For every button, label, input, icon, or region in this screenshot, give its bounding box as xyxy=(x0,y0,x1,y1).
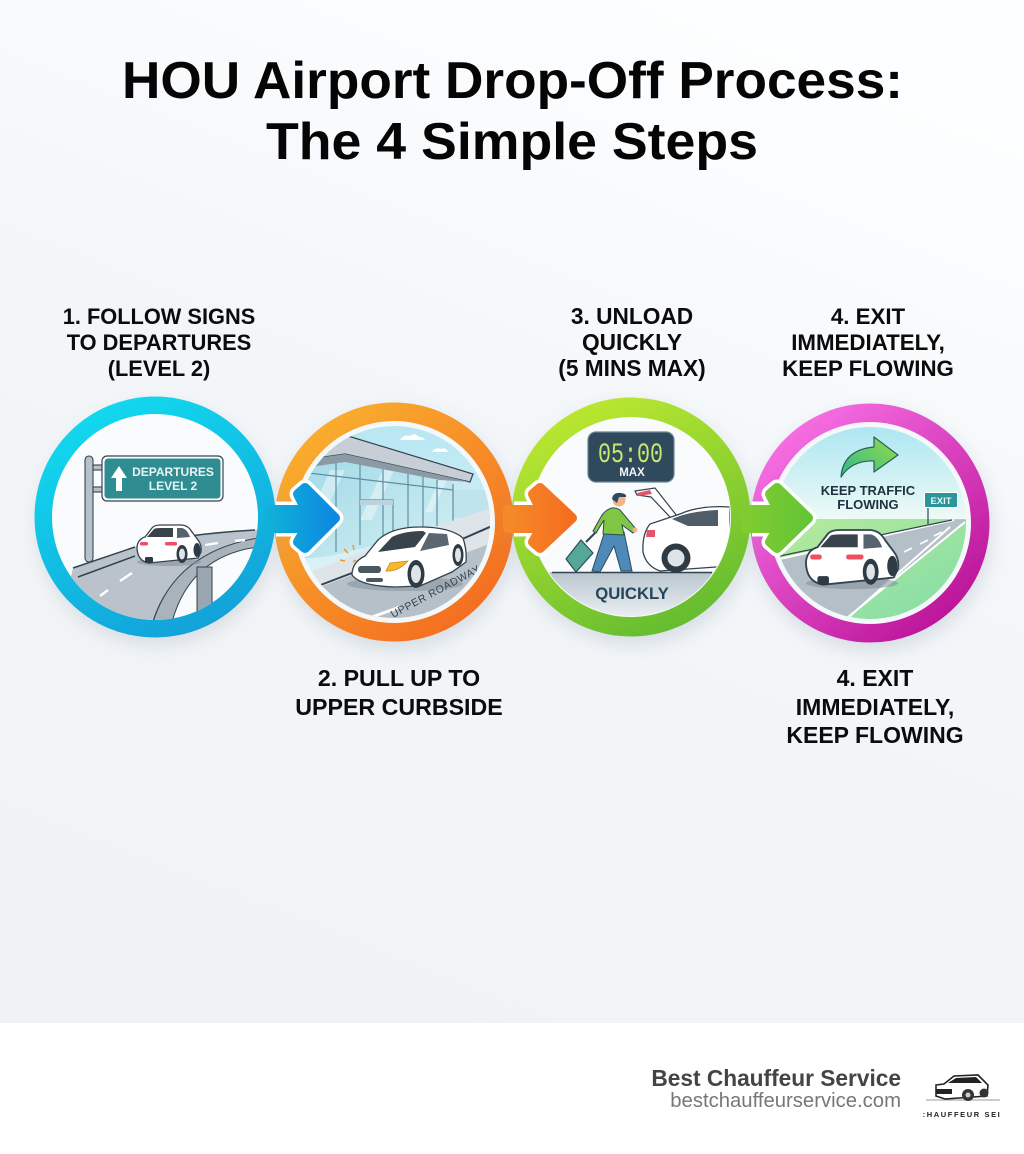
label: step 4 upper: KEEP FLOWING xyxy=(782,356,954,381)
scene: unloading xyxy=(548,431,730,616)
exit sign xyxy=(924,492,958,524)
departures sign: LEVEL 2 xyxy=(149,479,198,493)
label: step 4 upper: 4. EXIT xyxy=(831,304,906,329)
title xyxy=(122,52,903,171)
scene: terminal and car xyxy=(304,426,490,618)
person with luggage xyxy=(566,493,638,572)
label: step 1: TO DEPARTURES xyxy=(67,330,251,355)
scene: road and keep traffic flowing: FLOWING xyxy=(837,497,899,512)
scene: road and keep traffic flowing xyxy=(780,427,966,619)
departures sign xyxy=(102,456,223,501)
timer xyxy=(588,432,674,482)
circle: step 2 upper curbside xyxy=(274,402,516,650)
footer brand text: bestchauffeurservice.com xyxy=(670,1090,901,1112)
label: step 4 lower: IMMEDIATELY, xyxy=(796,694,954,720)
footer brand text xyxy=(651,1065,901,1112)
label: step 3: QUICKLY xyxy=(582,329,682,355)
label: step 1: (LEVEL 2) xyxy=(108,356,210,381)
timer: MAX xyxy=(619,467,645,479)
timer: 05:00 xyxy=(598,440,663,471)
label: step 4 lower: 4. EXIT xyxy=(837,665,913,691)
green turn arrow xyxy=(841,437,898,477)
circle: step 4 exit xyxy=(750,404,992,651)
label: step 2: UPPER CURBSIDE xyxy=(295,694,503,720)
footer brand text: Best Chauffeur Service xyxy=(651,1065,901,1091)
exit sign: EXIT xyxy=(930,496,952,507)
circle: step 3 unload xyxy=(512,398,753,645)
departures sign: DEPARTURES xyxy=(132,465,214,479)
label: step 3: (5 MINS MAX) xyxy=(558,355,706,381)
footer band xyxy=(0,1023,1024,1154)
footer logo xyxy=(923,1075,1001,1119)
label: step 4 upper: IMMEDIATELY, xyxy=(791,330,945,355)
road ramp xyxy=(60,530,258,622)
title: HOU Airport Drop-Off Process: xyxy=(122,52,903,110)
scene: overhead sign and ramp xyxy=(60,456,258,622)
arrow: step 1 to 2 xyxy=(270,488,335,548)
title: The 4 Simple Steps xyxy=(266,113,758,171)
arrow: step 3 to 4 xyxy=(746,488,808,548)
label: step 3: 3. UNLOAD xyxy=(571,303,693,329)
arrow: step 2 to 3 xyxy=(508,488,572,548)
sign pole xyxy=(85,456,102,562)
front car xyxy=(340,527,466,591)
footer logo: :HAUFFEUR SEI xyxy=(923,1110,1001,1119)
road text: UPPER ROADWAY xyxy=(389,563,483,621)
label: step 2: 2. PULL UP TO xyxy=(318,665,480,691)
label: step 1: 1. FOLLOW SIGNS xyxy=(63,304,255,329)
road text: QUICKLY xyxy=(595,584,669,603)
label: step 4 lower: KEEP FLOWING xyxy=(786,722,964,748)
scene text: KEEP TRAFFIC xyxy=(821,483,916,498)
circle: step 1 departures xyxy=(34,396,277,645)
car and open trunk xyxy=(635,488,730,572)
